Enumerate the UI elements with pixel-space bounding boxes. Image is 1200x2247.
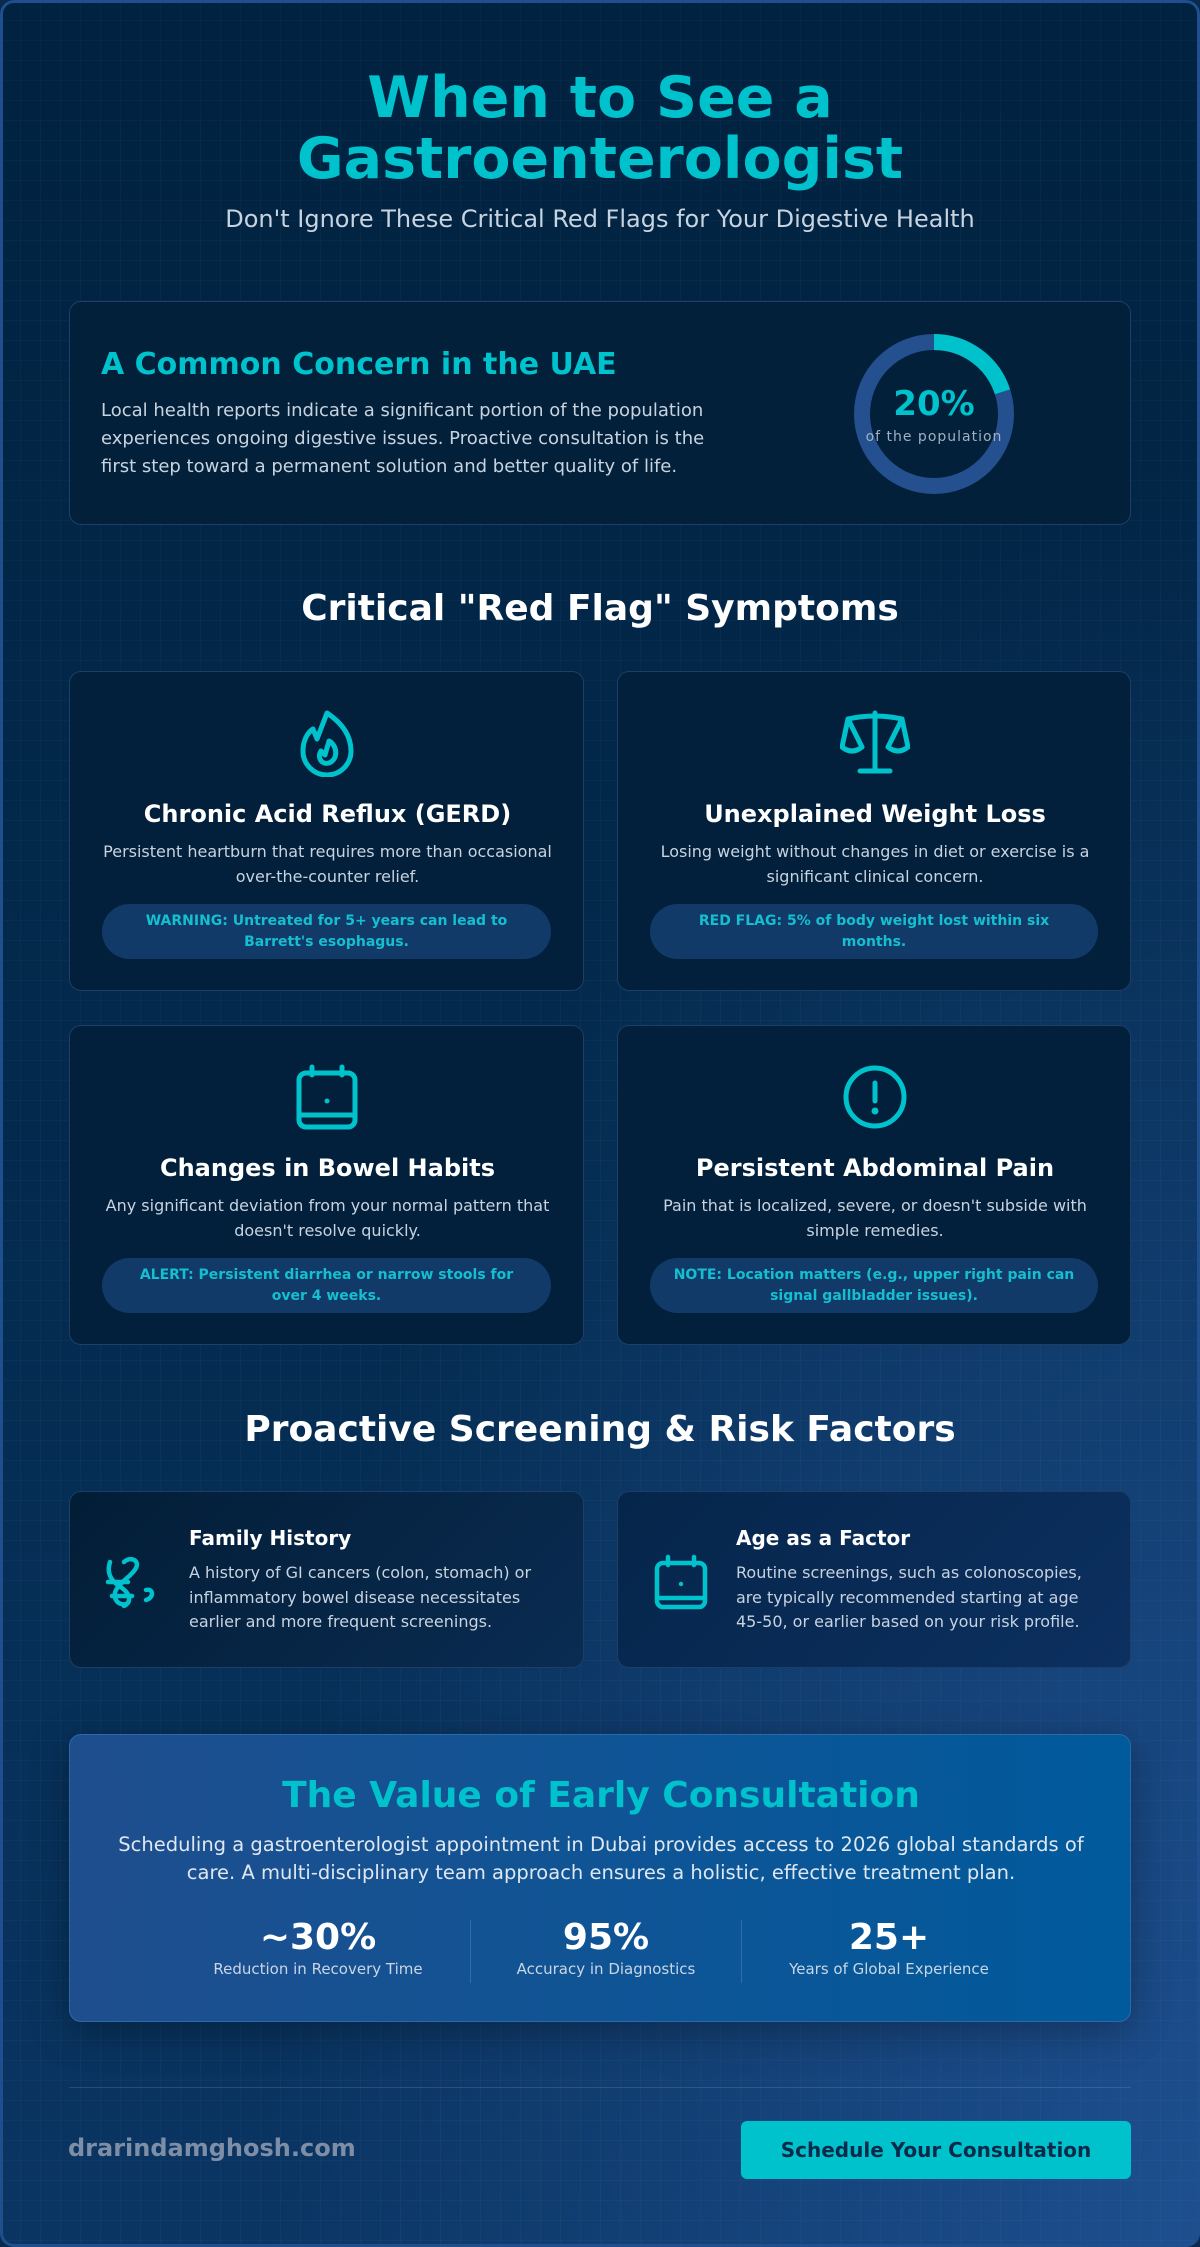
heading: red flag symptoms: Critical "Red Flag" Symptoms <box>301 588 899 629</box>
heading: The Value of Early Consultation <box>282 1775 920 1816</box>
text: Scheduling a gastroenterologist appointment in Dubai provides access to 2026 global standards of care. A multi-disciplinary team approach ensures a holistic, effective treatment plan. <box>118 1833 1084 1884</box>
panel: family history <box>69 1491 584 1668</box>
text: A history of GI cancers (colon, stomach) or inflammatory bowel disease necessitates earlier and more frequent screenings. <box>189 1563 531 1631</box>
heading: Persistent Abdominal Pain <box>696 1154 1054 1182</box>
callout: RED FLAG: 5% of body weight lost within six months. <box>699 912 1049 950</box>
callout: NOTE: Location matters (e.g., upper right pain can signal gallbladder issues). <box>674 1266 1074 1304</box>
footer: website: drarindamghosh.com <box>68 2134 356 2162</box>
stat: experience: Years of Global Experience <box>789 1960 989 1978</box>
chart: donut 20%: 20% <box>893 384 975 424</box>
title <box>297 65 903 192</box>
text: Persistent heartburn that requires more than occasional over-the-counter relief. <box>103 842 552 886</box>
callout <box>650 904 1098 959</box>
callout: ALERT: Persistent diarrhea or narrow stools for over 4 weeks. <box>140 1266 513 1304</box>
stat: accuracy: Accuracy in Diagnostics <box>517 1960 695 1978</box>
text: concern body: Local health reports indicate a significant portion of the population experiences ongoing digestive issues. Proactive consultation is the first step toward a permanent solution and better quality of life. <box>101 400 704 477</box>
heading: Family History <box>189 1526 351 1550</box>
callout <box>102 904 551 959</box>
panel: UAE concern <box>69 301 1131 525</box>
heading: concern: A Common Concern in the UAE <box>101 347 617 382</box>
chart: donut 20% <box>854 334 1014 494</box>
title: When to See a <box>367 65 833 131</box>
heading: Age as a Factor <box>736 1526 910 1550</box>
icon: exclamation circle <box>844 1066 906 1128</box>
stat: recovery: Reduction in Recovery Time <box>213 1960 423 1978</box>
subtitle: Don't Ignore These Critical Red Flags for Your Digestive Health <box>225 205 975 233</box>
stat: accuracy <box>516 1917 695 1978</box>
text: Pain that is localized, severe, or doesn't subside with simple remedies. <box>663 1196 1087 1240</box>
icon: flame <box>300 710 354 777</box>
stat: accuracy: 95% <box>563 1917 649 1958</box>
button: schedule <box>741 2121 1131 2179</box>
text: Any significant deviation from your normal pattern that doesn't resolve quickly. <box>106 1196 549 1240</box>
icon: calendar <box>296 1064 358 1130</box>
panel: age <box>617 1491 1131 1668</box>
text: Routine screenings, such as colonoscopies, are typically recommended starting at age 45-50, or earlier based on your risk profile. <box>736 1563 1082 1631</box>
stat: recovery <box>213 1917 423 1978</box>
callout: WARNING: Untreated for 5+ years can lead to Barrett's esophagus. <box>146 912 507 950</box>
heading: Chronic Acid Reflux (GERD) <box>144 800 511 828</box>
icon: dna <box>106 1556 154 1608</box>
icon: scales <box>840 710 910 774</box>
callout <box>102 1258 551 1313</box>
callout <box>650 1258 1098 1313</box>
stat: experience <box>789 1917 989 1978</box>
icon: calendar <box>654 1554 708 1610</box>
heading: Unexplained Weight Loss <box>704 800 1046 828</box>
stat: recovery: ~30% <box>260 1917 376 1958</box>
panel: value of early consultation <box>69 1734 1131 2022</box>
panel: GERD <box>69 671 584 991</box>
panel: bowel habits <box>69 1025 584 1345</box>
chart: donut 20%: of the population <box>866 429 1002 445</box>
heading: screening: Proactive Screening & Risk Factors <box>244 1409 956 1450</box>
panel: abdominal pain <box>617 1025 1131 1345</box>
title: Gastroenterologist <box>297 126 903 192</box>
button: schedule: Schedule Your Consultation <box>781 2138 1091 2162</box>
heading: Changes in Bowel Habits <box>160 1154 495 1182</box>
text: Losing weight without changes in diet or exercise is a significant clinical concern. <box>661 842 1089 886</box>
stat: experience: 25+ <box>849 1917 929 1958</box>
panel: weight loss <box>617 671 1131 991</box>
